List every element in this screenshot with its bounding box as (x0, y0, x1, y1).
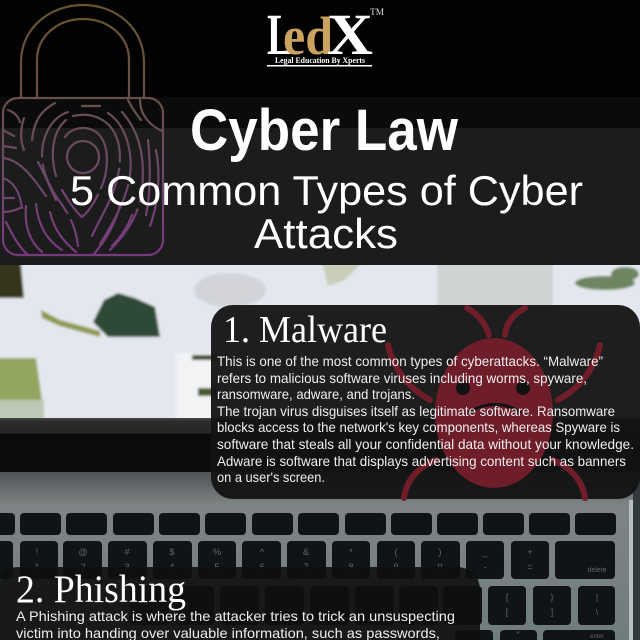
panel: malware (211, 305, 640, 499)
logo: LedX: TM (370, 7, 384, 17)
laptop screen photo (0, 255, 640, 425)
panel: phishing (0, 567, 480, 640)
laptop bezel (0, 418, 640, 472)
keyboard: 9 (393, 562, 399, 572)
keyboard: " (516, 630, 520, 640)
keyboard: ( (394, 547, 398, 557)
keyboard: & (303, 547, 309, 557)
keyboard: [ (506, 607, 509, 617)
heading: phishing: 2. Phishing (16, 568, 186, 611)
keyboard: { (505, 592, 509, 602)
keyboard: @ (78, 547, 88, 557)
logo: LedX (267, 2, 384, 67)
text: malware description: on a user's screen. (217, 470, 325, 485)
keyboard: - (484, 562, 486, 572)
text: malware description: software that steals all your confidential data without your knowledge. (217, 437, 634, 452)
header background band (0, 0, 640, 265)
icon: bug (388, 308, 600, 498)
keyboard: ! (36, 547, 38, 557)
subtitle: Attacks (254, 210, 398, 257)
text: malware description: The trojan virus disguises itself as legitimate software. Ransomware (217, 404, 615, 419)
keyboard: ] (551, 607, 553, 617)
logo: LedX: X (327, 2, 373, 67)
keyboard: $ (169, 547, 175, 557)
text: malware description: This is one of the most common types of cyberattacks. “Malware” (217, 354, 603, 369)
subtitle: 5 Common Types of Cyber (70, 167, 583, 214)
keyboard: delete (587, 567, 607, 574)
keyboard: 3 (124, 562, 130, 572)
keyboard: # (124, 547, 130, 557)
keyboard: 1 (34, 562, 40, 572)
text: malware description: blocks access to the network's key components, whereas Spyware is (217, 420, 620, 435)
keyboard (0, 472, 640, 640)
subtitle (70, 167, 583, 257)
keyboard: | (596, 592, 598, 602)
keyboard: 5 (214, 562, 220, 572)
keyboard: * (349, 547, 353, 557)
keyboard: 0 (437, 562, 443, 572)
keyboard: \ (596, 607, 599, 617)
keyboard: 6 (259, 562, 265, 572)
heading: malware: 1. Malware (223, 309, 387, 351)
keyboard: 4 (169, 562, 175, 572)
logo: LedX: ed (283, 6, 333, 66)
keyboard: ) (438, 547, 442, 557)
icon: fingerprint padlock (3, 5, 164, 255)
keyboard: ^ (260, 547, 265, 557)
keyboard: enter (590, 634, 604, 640)
keyboard: _ (481, 547, 488, 557)
text: malware description (217, 354, 634, 485)
logo: LedX: Legal Education By Xperts (275, 56, 365, 65)
text: malware description: refers to malicious software viruses including worms, spyware, (217, 371, 587, 386)
title: Cyber Law (190, 98, 459, 163)
logo: LedX: L (267, 2, 293, 67)
keyboard: + (527, 547, 533, 557)
keyboard: 2 (80, 562, 86, 572)
keyboard: } (550, 592, 554, 602)
keyboard: % (213, 547, 221, 557)
text: phishing description (16, 609, 455, 640)
keyboard: = (527, 562, 533, 572)
text: phishing description: A Phishing attack is where the attacker tries to trick an unsuspecting (16, 609, 455, 624)
text: malware description: Adware is software that displays advertising content such as banners (217, 454, 626, 469)
keyboard: 8 (348, 562, 354, 572)
text: malware description: ransomware, adware, and trojans. (217, 387, 415, 402)
keyboard: 7 (303, 562, 309, 572)
